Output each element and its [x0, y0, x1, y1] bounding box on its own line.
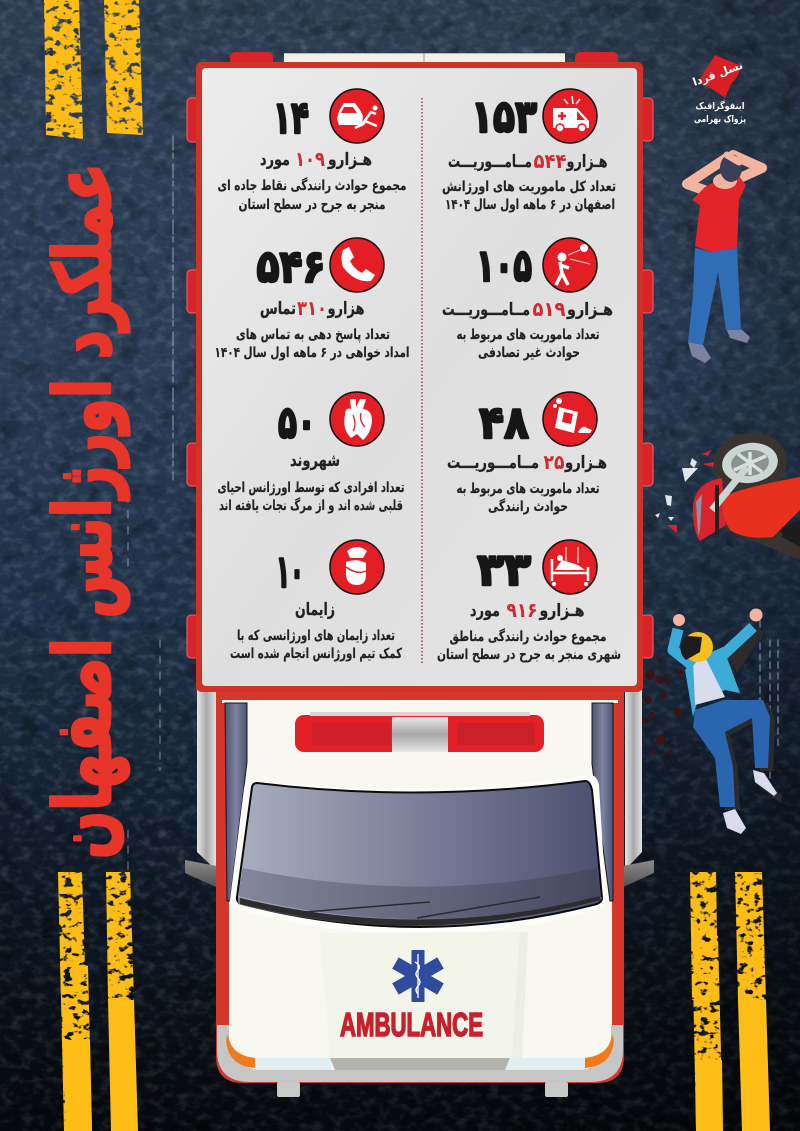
stat: urban accidents: هـزارو: [539, 601, 584, 621]
blood splatter: [642, 658, 683, 754]
stat: road accidents: منجر به جرح در سطح استان: [238, 197, 386, 213]
ambulance roof strips: [284, 53, 565, 63]
stat: citizens revived: [218, 392, 404, 514]
icon: car hitting pedestrian: [330, 89, 384, 143]
stat: non-accident missions: ۱۰۵: [476, 239, 532, 292]
road stripes: bottom right: [690, 872, 770, 1131]
stat: total missions: ۵۴۴: [534, 149, 566, 173]
stat: driving missions: حوادث رانندگی: [488, 498, 568, 515]
stat: driving missions: ۴۸: [479, 396, 529, 449]
road stripes: bottom left: [58, 872, 138, 1131]
figure: fallen rider: [673, 608, 782, 834]
stat: births: تعداد زایمان های اورژانسی که با: [237, 628, 395, 644]
stat: urban accidents: مجموع حوادث رانندگی مناطق: [450, 628, 606, 645]
stat: road accidents: [218, 89, 406, 213]
stat: non-accident missions: [442, 238, 613, 361]
roof lights: [230, 52, 618, 66]
stat: citizens revived: ۵۰: [278, 396, 316, 449]
stat: road accidents: مجموع حوادث رانندگی نقاط جاده ای: [218, 177, 406, 194]
icon: heart: [330, 392, 384, 446]
light bar: [295, 712, 544, 752]
stat: calls answered: هزارو: [327, 299, 364, 319]
stat: urban accidents: ۳۳: [477, 543, 531, 596]
side windows: [225, 703, 613, 901]
stat: driving missions: ۲۵: [544, 450, 564, 474]
figure: crashed motorcycle: [655, 428, 800, 560]
body: [216, 680, 624, 1083]
stat: total missions: تعداد کل ماموریت های اورژانش: [442, 179, 616, 195]
stat: road accidents: ۱۰۹: [295, 147, 325, 171]
windshield: [230, 775, 606, 935]
figure: distressed man: [687, 154, 762, 363]
logo: نسل فردا: [691, 59, 745, 89]
stat: urban accidents: مورد: [470, 601, 500, 621]
road stripes: top left: [44, 0, 143, 139]
stat: total missions: مــامـــوریـــت: [448, 152, 532, 172]
stat: total missions: [442, 89, 616, 213]
stat: non-accident missions: هـزارو: [566, 300, 613, 320]
logo: [691, 55, 746, 125]
stat: road accidents: هـزارو: [327, 150, 372, 170]
stat: driving missions: مــامـــوریـــت: [447, 453, 539, 473]
icon: hospital bed: [543, 540, 597, 594]
stat: total missions: اصفهان در ۶ ماهه اول سال ۱۴۰۴: [445, 197, 615, 213]
steel side panels: [197, 680, 642, 870]
stat: births: کمک تیم اورژانس انجام شده است: [230, 646, 403, 662]
icon: injured person: [543, 238, 597, 292]
stat: calls answered: تعداد پاسخ دهی به تماس های: [236, 327, 390, 343]
stat: calls answered: تماس: [260, 299, 296, 319]
stat: driving missions: هـزارو: [564, 453, 607, 473]
stat: non-accident missions: مــامـــوریـــت: [442, 300, 530, 320]
info panel: [196, 62, 643, 692]
stat: calls answered: ۵۴۶: [256, 240, 326, 293]
stat: urban accidents: ۹۱۶: [506, 598, 538, 622]
stat: births: زایمان: [295, 600, 335, 620]
side tabs: [187, 98, 653, 658]
icon: ambulance: [543, 89, 597, 143]
logo: پژواک بهرامی: [694, 114, 746, 125]
stat: driving missions: تعداد ماموریت های مربوط به: [456, 481, 600, 497]
stat: citizens revived: تعداد افرادی که توسط اورژانس احیای: [218, 480, 404, 496]
icon: swaddled baby: [330, 540, 384, 594]
stat: non-accident missions: ۵۱۹: [532, 297, 566, 321]
stat: calls answered: [214, 238, 410, 361]
icon: telephone: [330, 238, 384, 292]
hood: [320, 932, 520, 1058]
stat: total missions: هـزارو: [566, 152, 608, 172]
stat: births: [230, 540, 403, 662]
stat: citizens revived: شهروند: [290, 451, 340, 471]
stat: non-accident missions: حوادث غیر تصادفی: [478, 345, 580, 361]
stat: urban accidents: شهری منجر به جرح در سطح استان: [437, 647, 621, 663]
stat: road accidents: ۱۴: [273, 91, 309, 144]
ambulance label: AMBULANCE: [340, 1006, 483, 1043]
stat: calls answered: ۳۱۰: [297, 296, 327, 320]
side mirrors: [185, 860, 654, 892]
bumper: [217, 1025, 623, 1097]
logo: اینفوگرافیک: [696, 100, 744, 112]
icon: overturned car: [543, 392, 597, 446]
skid marks: [128, 136, 778, 880]
star of life: [392, 950, 444, 1002]
stat: total missions: ۱۵۳: [471, 90, 537, 143]
stat: non-accident missions: تعداد ماموریت های مربوط به: [456, 327, 600, 343]
stat: births: ۱۰: [276, 545, 304, 598]
stat: citizens revived: قلبی شده اند و از مرگ نجات یافته اند: [219, 497, 403, 514]
ambulance: [185, 52, 654, 1097]
stat: calls answered: امداد خواهی در ۶ ماهه اول سال ۱۴۰۴: [214, 345, 410, 361]
stat: urban accidents: [437, 540, 621, 663]
stat: driving missions: [447, 392, 607, 515]
stat: road accidents: مورد: [260, 150, 290, 170]
